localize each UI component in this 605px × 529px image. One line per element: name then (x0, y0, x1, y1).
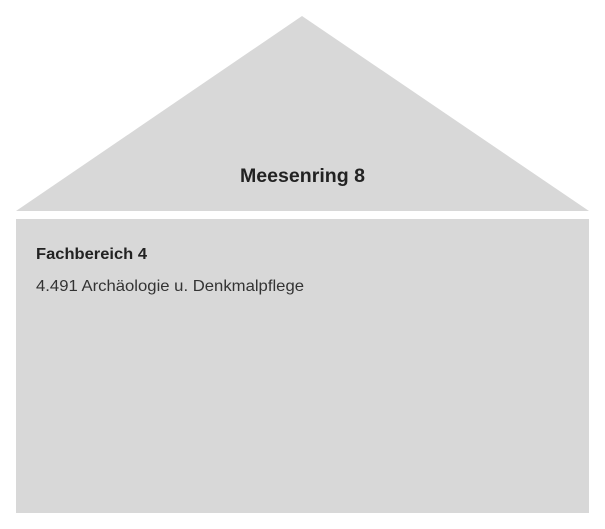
building name heading: Meesenring 8 (240, 166, 365, 187)
room entry: 4.491 Archäologie u. Denkmalpflege (36, 278, 304, 295)
department heading: Fachbereich 4 (36, 246, 147, 263)
floor panel: Fachbereich 4 (16, 219, 589, 513)
